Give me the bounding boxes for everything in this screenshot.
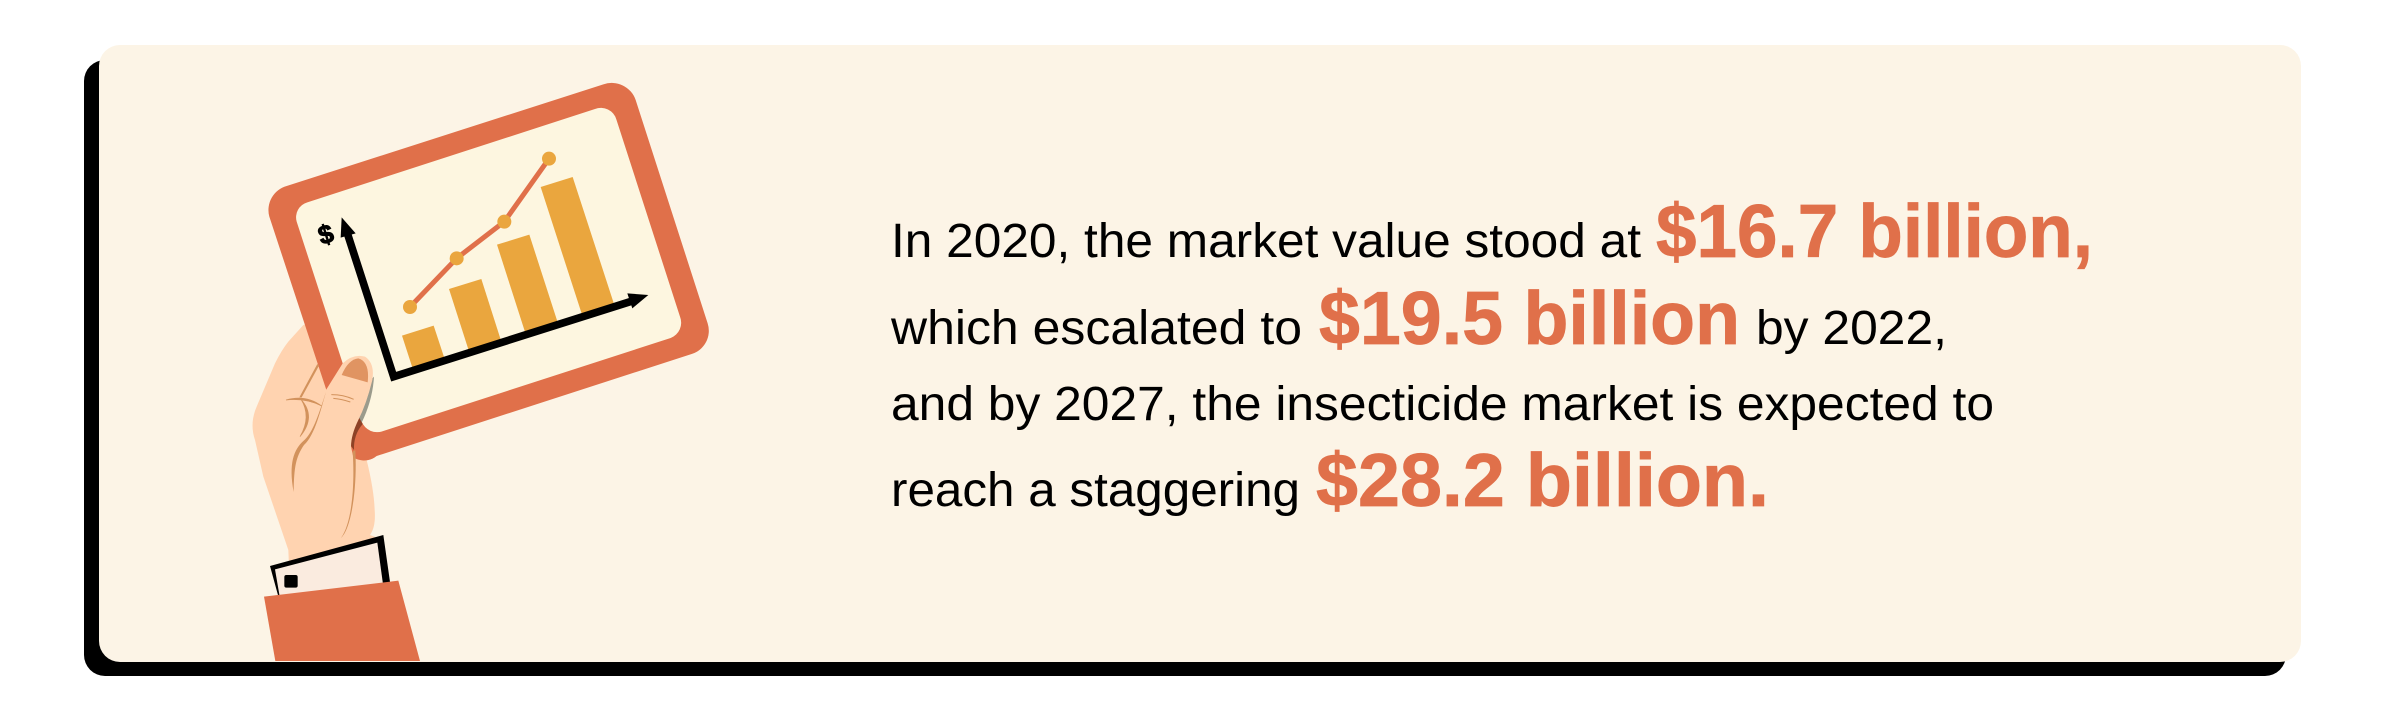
- line 2: $19.5 billion: [1319, 276, 1740, 360]
- illustration: hand holding tablet with growth chart: [253, 83, 709, 661]
- bars: [402, 177, 614, 371]
- line 3: and by 2027, the insecticide market is expected to: [891, 378, 1994, 431]
- line 4: $28.2 billion.: [1316, 438, 1769, 522]
- line 1: $16.7 billion,: [1656, 189, 2093, 273]
- line 1: In 2020, the market value stood at: [891, 215, 1641, 268]
- text block: market values: [890, 189, 2093, 522]
- line 2: [890, 276, 1947, 360]
- black offset card shadow: [84, 60, 2286, 676]
- dollar sign axis label: $: [314, 218, 338, 251]
- line 4: reach a staggering: [891, 464, 1300, 517]
- tablet frame: [268, 83, 709, 460]
- thumb and finger details: [286, 356, 374, 538]
- shirt cuff: [270, 535, 391, 600]
- line 1: [891, 189, 2093, 273]
- jacket sleeve: [264, 581, 420, 661]
- line 2: which escalated to: [890, 302, 1302, 355]
- hand palm: [253, 320, 383, 567]
- line 4: [891, 438, 1769, 522]
- line 2: by 2022,: [1756, 302, 1947, 355]
- axes: [341, 217, 648, 377]
- tablet screen: [296, 108, 681, 432]
- growth chart: [314, 152, 648, 377]
- trend line: [403, 152, 556, 314]
